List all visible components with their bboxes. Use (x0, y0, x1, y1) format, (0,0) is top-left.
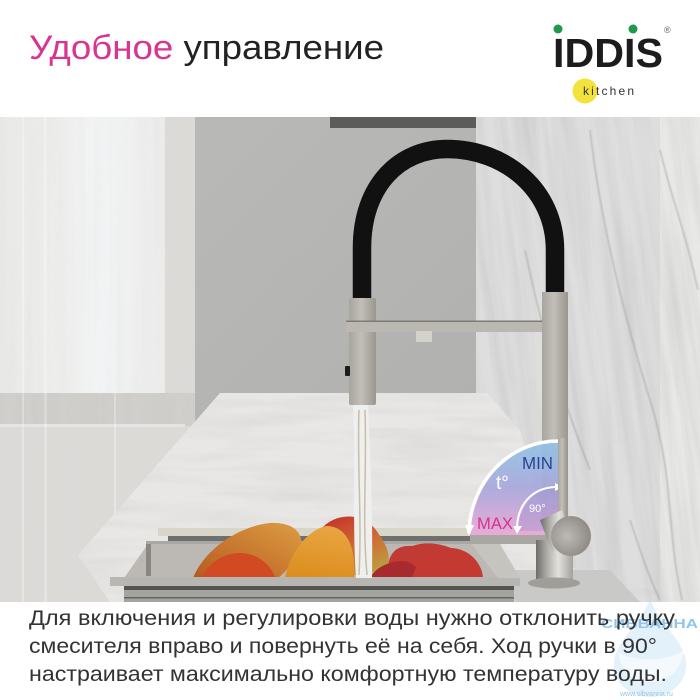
kitchen photo scene (0, 117, 700, 602)
cabinet underside (330, 117, 490, 128)
back wall (195, 117, 476, 422)
MIN label: MIN (522, 453, 553, 473)
marble counter (60, 390, 660, 605)
watermark drop (614, 598, 686, 697)
mango large (193, 523, 301, 578)
handle knob (551, 516, 591, 556)
mango back (320, 516, 389, 578)
t degree label: t° (496, 473, 509, 494)
faucet handle (540, 438, 591, 556)
inner darker pie (518, 487, 558, 531)
arrowhead bottom (513, 526, 522, 534)
water stream (353, 405, 372, 578)
mango red-left (202, 553, 275, 578)
logo wordmark: IDDIS (553, 30, 663, 76)
watermark (601, 598, 699, 698)
fan tick edge (469, 441, 558, 533)
handle neck (540, 510, 572, 552)
handle rod (558, 438, 565, 516)
sink back rail (158, 528, 470, 536)
arc arrow (517, 487, 555, 529)
description (29, 606, 675, 686)
logo: IDDIS kitchen: kitchen (583, 84, 634, 98)
curtain and window (0, 117, 195, 602)
90 degree label: 90° (529, 503, 546, 515)
sink front rail (110, 577, 520, 586)
line 2: смесителя вправо и повернуть её на себя. Ход ручки в 90° (29, 634, 657, 658)
mango front (285, 526, 354, 578)
sink right arm (470, 535, 548, 544)
handle stem and base (536, 540, 573, 582)
black flexible hose (362, 149, 555, 298)
logo: IDDIS kitchen: ® (664, 25, 671, 35)
mango right (412, 548, 483, 578)
sink inner (124, 544, 498, 578)
fan wedge (468, 440, 558, 535)
title: Удобное управление (29, 29, 384, 67)
MAX label: MAX (477, 514, 513, 533)
line 1: Для включения и регулировки воды нужно отклонить ручку (29, 606, 675, 630)
faucet spout body (349, 298, 376, 405)
logo: IDDIS kitchen (553, 24, 671, 104)
arrowhead top (555, 483, 558, 491)
mango small red (372, 561, 416, 577)
marble right wall (476, 117, 700, 602)
line 3: настраивает максимально комфортную температуру воды. (29, 662, 667, 686)
watermark word: СИБВАННА (601, 616, 699, 631)
connecting arm (349, 322, 542, 332)
red mangoes back (388, 543, 452, 568)
watermark url: www.sibvanna.ru (619, 691, 673, 698)
arrowhead left (465, 525, 474, 536)
lever stop (345, 366, 350, 376)
temperature fan diagram (465, 440, 563, 536)
faucet column (542, 292, 568, 517)
faucet (345, 149, 580, 588)
sink with mangoes (110, 516, 548, 602)
watermark bath (618, 650, 684, 682)
